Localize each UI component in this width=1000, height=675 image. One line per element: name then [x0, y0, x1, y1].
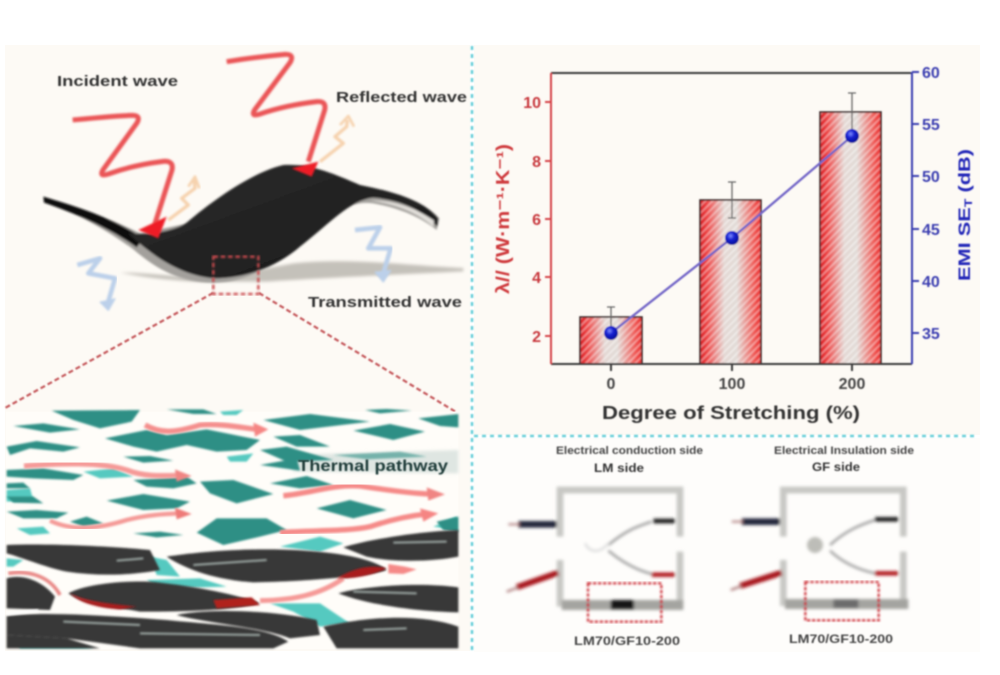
label: reflected wave: Reflected wave — [336, 89, 467, 106]
arrow: thermal pathway 6 — [213, 564, 417, 608]
right axis numbers: 45 — [922, 222, 940, 239]
arrow: reflected wave right — [320, 116, 354, 162]
photo: conduction side — [507, 490, 683, 609]
label: left sample name: LM70/GF10-200 — [574, 634, 680, 648]
x axis numbers: 100 — [719, 376, 745, 393]
dotted dividers — [472, 46, 976, 650]
left axis numbers: 10 — [523, 95, 541, 112]
right axis numbers: 60 — [922, 65, 940, 82]
x axis numbers: 200 — [839, 376, 865, 393]
left axis numbers: 2 — [532, 329, 541, 346]
dark flakes — [7, 530, 458, 648]
arrow: incident wave left — [73, 115, 172, 238]
label: LM side: LM side — [594, 463, 644, 475]
arrow: thermal pathway 2 — [24, 464, 192, 482]
composite sheet — [43, 165, 439, 283]
right axis title: T — [963, 198, 975, 207]
left axis numbers — [523, 95, 541, 346]
bar: 100 percent — [700, 200, 761, 364]
right axis numbers: 50 — [922, 169, 940, 186]
data line: shielding — [611, 136, 852, 333]
light teal flakes — [7, 410, 457, 648]
right axis title: EMI SE — [955, 223, 974, 281]
panel: wave interaction illustration — [5, 54, 467, 412]
x axis title: Degree of Stretching (%) — [602, 403, 860, 423]
right axis numbers: 55 — [922, 117, 940, 134]
right axis numbers: 40 — [922, 274, 940, 291]
left axis title: λ// (W·m⁻¹·K⁻¹) — [493, 144, 513, 294]
left axis numbers: 4 — [532, 270, 541, 287]
arrow: thermal pathway 7 — [8, 573, 137, 609]
ground shadow — [120, 261, 463, 282]
arrow: thermal pathway 1 — [145, 423, 268, 437]
label: right sample name: LM70/GF10-200 — [789, 632, 893, 646]
left axis numbers: 6 — [532, 212, 541, 229]
arrow: thermal pathway 5 — [280, 508, 438, 533]
pale haze behind label — [287, 450, 458, 473]
right axis numbers: 35 — [922, 326, 940, 343]
label: insulation side heading: Electrical Insulation side — [774, 445, 914, 457]
data points — [604, 129, 859, 340]
right axis title: (dB) — [955, 149, 974, 199]
zoom box — [213, 257, 258, 294]
label: GF side: GF side — [812, 462, 860, 474]
photo: insulation side — [731, 490, 908, 608]
bar: 0 percent — [580, 317, 642, 364]
label: thermal pathway: Thermal pathway — [298, 458, 448, 475]
x axis numbers — [607, 376, 865, 393]
panel: electrical test photos — [507, 445, 914, 648]
sample box: insulation side — [805, 582, 879, 620]
axes frame — [545, 72, 919, 371]
panel: thermal pathway illustration — [6, 409, 458, 649]
label: conduction side heading: Electrical conduction side — [556, 445, 703, 457]
icon: transmitted wave left — [77, 258, 115, 310]
arrow: thermal pathway 4 — [283, 486, 445, 501]
left axis numbers: 8 — [532, 154, 541, 171]
icon: transmitted wave right — [355, 227, 391, 282]
dashed zoom lines — [5, 293, 456, 412]
teal flakes — [7, 409, 458, 545]
arrow: thermal pathway 3 — [50, 508, 192, 528]
x axis numbers: 0 — [607, 376, 616, 393]
label: transmitted wave: Transmitted wave — [308, 294, 462, 311]
arrow: reflected wave left — [168, 177, 199, 220]
flake highlights — [7, 542, 447, 635]
sample box: conduction side — [588, 583, 661, 622]
right axis numbers — [922, 65, 940, 343]
error bars — [607, 93, 856, 328]
arrow: incident wave right — [227, 54, 325, 177]
bar chart: conductivity and shielding vs stretching — [493, 65, 975, 423]
bar: 200 percent — [820, 112, 881, 364]
label: incident wave: Incident wave — [57, 73, 178, 90]
